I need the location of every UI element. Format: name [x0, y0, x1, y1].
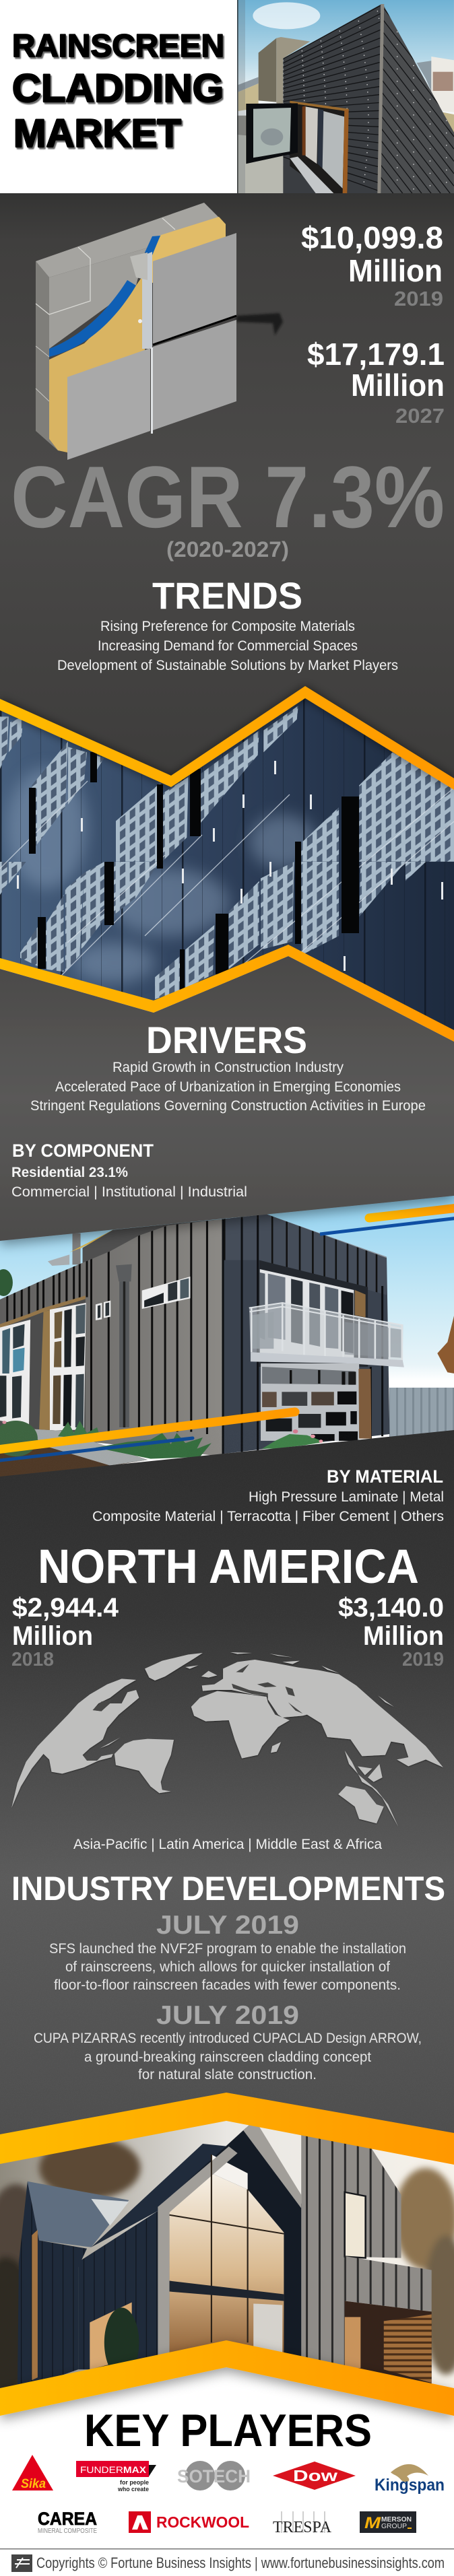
- dark facade: [223, 1214, 389, 1454]
- chevron: bottom orange band of roof photo: [0, 2340, 454, 2416]
- photo: modern house with metal cladding: [0, 1192, 454, 1478]
- development: CUPA PIZARRAS: [34, 2001, 422, 2082]
- text: driver list: Stringent Regulations Governing Construction Activities in Europe: [30, 1098, 426, 1114]
- upper floor glazing: [259, 1260, 368, 1367]
- development: CUPA PIZARRAS: CUPA PIZARRAS recently introduced CUPACLAD Design ARROW,: [34, 2031, 422, 2046]
- section: trends: Increasing Demand for Commercial Spaces: [98, 638, 358, 654]
- heading: north america: NORTH AMERICA: [38, 1540, 419, 1594]
- panel: upper cladding board: [153, 233, 236, 345]
- garage door: [261, 1363, 359, 1441]
- text: by component: [11, 1141, 247, 1200]
- logo: Fundermax: for people: [120, 2479, 149, 2486]
- right wing with standing seam cladding: [301, 2135, 432, 2383]
- text: by material: High Pressure Laminate | Metal: [249, 1489, 444, 1505]
- text: by material: Composite Material | Terracotta | Fiber Cement | Others: [92, 1509, 444, 1524]
- stat: market size 2027: 2027: [395, 404, 445, 428]
- tree and pole behind the house: [0, 1230, 116, 1296]
- stat: market size 2019: $10,099.8: [301, 220, 443, 255]
- downpipe: [116, 1264, 132, 1427]
- section: trends: Rising Preference for Composite Materials: [100, 619, 355, 634]
- logo: Merson Group: GROUP: [381, 2522, 407, 2530]
- development: SFS: SFS launched the NVF2F program to enable the installation: [49, 1941, 406, 1957]
- text: by material: [92, 1466, 444, 1524]
- panel: drivers: [0, 945, 454, 1241]
- footer: logo mark: [11, 2554, 32, 2572]
- text: driver list: Rapid Growth in Construction Industry: [112, 1060, 344, 1075]
- stat: market size 2019: 2019: [394, 287, 443, 310]
- text: by component: Commercial | Institutional | Industrial: [11, 1184, 247, 1200]
- logo: Sotech: SOTECH: [177, 2466, 251, 2486]
- section: trends: TRENDS: [152, 574, 302, 617]
- stat: market size 2027: [307, 337, 445, 428]
- stat: market size 2019: [301, 220, 443, 310]
- accent stripes, lower: [0, 1412, 295, 1460]
- chevron: top orange band of roof photo: [0, 2093, 454, 2165]
- logo: Dow: [273, 2462, 356, 2490]
- stat: north america 2019: $3,140.0: [338, 1593, 444, 1623]
- section: trends: Development of Sustainable Solutions by Market Players: [57, 658, 398, 673]
- header: title block: [12, 28, 224, 156]
- left facade: [82, 1219, 222, 1263]
- logo: Kingspan: [375, 2464, 445, 2495]
- stat: north america 2019: [338, 1593, 444, 1670]
- logo: Merson Group: [360, 2511, 416, 2533]
- diagonal panel edges: [0, 781, 454, 975]
- stat: market size 2019: Million: [348, 253, 443, 288]
- stat: north america 2018: 2018: [11, 1649, 54, 1670]
- text: by component: Residential 23.1%: [11, 1165, 128, 1180]
- logo: Kingspan: Kingspan: [375, 2476, 445, 2495]
- logo: Trespa: [273, 2511, 332, 2536]
- ground, path and plants: [0, 1421, 325, 1478]
- logo: Merson Group: M: [364, 2514, 381, 2532]
- header: title block: RAINSCREEN: [12, 28, 224, 63]
- logo: Fundermax: FUNDER MAX: [80, 2464, 147, 2475]
- logo: Carea: MINERAL COMPOSITE: [38, 2528, 97, 2535]
- header photo: rainscreen clad building: [237, 0, 454, 193]
- stat: north america 2018: [11, 1593, 119, 1670]
- panel: lower left cladding board: [67, 348, 150, 460]
- header: title block: CLADDING: [12, 67, 224, 110]
- logo: Merson Group: MERSON: [381, 2515, 412, 2523]
- left wing: [18, 2181, 129, 2391]
- stat: market size 2027: $17,179.1: [307, 337, 445, 372]
- development: SFS: floor-to-floor rainscreen facades with fewer components.: [54, 1977, 401, 1993]
- stat: north america 2019: Million: [363, 1621, 444, 1651]
- stat: market size 2027: Million: [351, 368, 445, 403]
- logo: Sika: [12, 2455, 53, 2491]
- heading: drivers: DRIVERS: [146, 1019, 307, 1061]
- photo: dark gabled house: [0, 2121, 454, 2388]
- section: trends: [57, 574, 398, 673]
- main gable: [78, 2120, 302, 2377]
- development: SFS: of rainscreens, which allows for quicker installation of: [65, 1959, 390, 1975]
- text: by material: BY MATERIAL: [327, 1466, 443, 1487]
- white footer area: [0, 2343, 454, 2576]
- logo: Dow: Dow: [293, 2467, 337, 2484]
- stat: north america 2019: 2019: [402, 1649, 444, 1670]
- black slots between panels: [29, 752, 359, 990]
- logo: Fundermax: [76, 2461, 156, 2493]
- panel clips: [17, 761, 443, 971]
- text: driver list: [30, 1060, 426, 1114]
- text: by component: BY COMPONENT: [12, 1141, 154, 1161]
- tree on right: [437, 1315, 454, 1374]
- diagram: rainscreen wall cross-section: [36, 203, 283, 460]
- heading: key players: KEY PLAYERS: [84, 2405, 372, 2456]
- logo: Carea: CAREA: [38, 2509, 97, 2529]
- development: CUPA PIZARRAS: for natural slate construction.: [138, 2067, 317, 2082]
- balcony: [249, 1302, 404, 1367]
- stat: north america 2018: $2,944.4: [12, 1593, 119, 1623]
- development: SFS: [49, 1911, 406, 1993]
- left windows: [0, 1303, 86, 1431]
- logo: Fundermax: who create: [117, 2486, 149, 2493]
- light perforated panels, upper band: [0, 706, 454, 862]
- light perforated panels, lower band: [0, 862, 426, 999]
- development: CUPA PIZARRAS: JULY 2019: [156, 2001, 299, 2030]
- photo: solar facade: [0, 686, 454, 1050]
- footer rule: [0, 2548, 454, 2549]
- accent stripes, upper right: [320, 1208, 454, 1234]
- inland seas: [93, 1664, 302, 1714]
- logo: Sotech: [177, 2461, 251, 2490]
- panel: regional and developments background: [0, 1430, 454, 2175]
- logo: Sika: Sika: [21, 2477, 46, 2491]
- world map: [11, 1652, 443, 1827]
- logo: Rockwool: [129, 2511, 249, 2533]
- logo: Trespa: TRESPA: [273, 2519, 332, 2536]
- text: other regions: Asia-Pacific | Latin America | Middle East & Africa: [73, 1837, 382, 1852]
- stat: CAGR: (2020-2027): [166, 537, 289, 562]
- panel: lower right cladding board: [153, 320, 236, 430]
- development: CUPA PIZARRAS: a ground-breaking rainscreen cladding concept: [84, 2049, 371, 2065]
- development: SFS: JULY 2019: [156, 1911, 299, 1940]
- header: title block: MARKET: [13, 112, 181, 156]
- dark background: market size section: [0, 193, 454, 786]
- text: driver list: Accelerated Pace of Urbanization in Emerging Economies: [55, 1079, 401, 1095]
- stat: north america 2018: Million: [12, 1621, 93, 1651]
- small awning windows: [96, 1277, 191, 1320]
- logo: Rockwool: ROCKWOOL: [156, 2513, 249, 2531]
- chevron: upper orange band: [0, 686, 454, 790]
